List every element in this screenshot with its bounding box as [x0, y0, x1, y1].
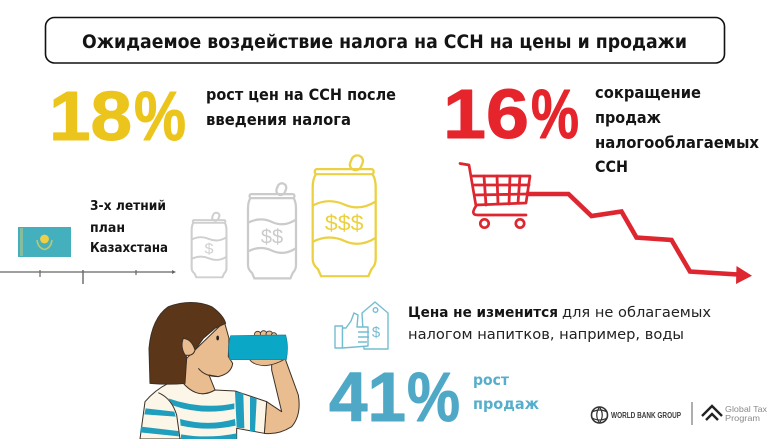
logo: Global Tax Program: Program — [725, 413, 760, 423]
illustration: person drinking — [140, 302, 299, 439]
text: sales growth label: рост — [473, 371, 509, 389]
text: sales growth label — [473, 371, 540, 413]
title — [46, 18, 724, 63]
stat: 41%: % — [407, 358, 460, 436]
icon: small can: $ — [205, 241, 214, 257]
chart: growing cans — [192, 154, 376, 278]
logo: Global Tax Program: Global Tax — [725, 404, 768, 414]
text: plan label: 3-х летний — [90, 198, 166, 214]
eye — [216, 336, 219, 340]
panel: price rise 18% — [49, 77, 396, 155]
icon: thumbs up with price tag — [335, 302, 388, 349]
icon: shopping cart — [460, 164, 530, 228]
text: price rise description: введения налога — [206, 110, 351, 129]
stat: 18%: % — [134, 77, 186, 155]
arrow: falling sales line — [526, 194, 752, 284]
neck and face — [183, 322, 233, 394]
logo: World Bank Group: WORLD BANK GROUP — [611, 411, 682, 420]
text: sales growth label: продаж — [473, 395, 540, 413]
hair — [149, 302, 226, 384]
icon: thumbs up with price tag: $ — [372, 324, 381, 341]
hand — [249, 358, 285, 366]
text: price rise description — [206, 85, 396, 129]
text: plan label: Казахстана — [90, 240, 168, 256]
logos — [592, 402, 768, 425]
stat: 18% — [49, 77, 186, 155]
text: price note: Цена не изменится — [408, 305, 558, 321]
text: sales cut description: ССН — [595, 157, 628, 176]
shirt — [140, 383, 267, 439]
text: price note — [408, 305, 711, 343]
logo: World Bank Group — [592, 407, 682, 423]
title: Ожидаемое воздействие налога на ССН на цены и продажи — [82, 31, 687, 53]
stat: 16%: 16 — [443, 75, 529, 153]
stat: 16%: % — [531, 75, 579, 153]
icon: large can — [313, 154, 376, 276]
cup — [229, 335, 288, 360]
text: plan label — [90, 198, 168, 256]
sleeve seam — [158, 393, 180, 439]
timeline — [0, 270, 176, 284]
text: price rise description: рост цен на ССН после — [206, 85, 396, 104]
icon: large can: $$$ — [325, 210, 364, 236]
panel: Kazakhstan plan — [0, 198, 176, 284]
stat: 18%: 18 — [49, 77, 132, 155]
panel: sales growth 41% — [329, 358, 540, 436]
fingers — [254, 331, 277, 338]
stat: 16% — [443, 75, 579, 153]
stat: 41%: 41 — [329, 358, 406, 436]
icon: small can — [192, 212, 226, 277]
icon: medium can — [248, 182, 296, 278]
stat: 41% — [329, 358, 460, 436]
icon: medium can: $$ — [261, 226, 283, 248]
logo: Global Tax Program — [702, 404, 768, 423]
shirt stripes — [140, 392, 257, 439]
panel: price unchanged — [335, 302, 711, 349]
text: sales cut description: продаж — [595, 108, 661, 127]
arm — [264, 358, 299, 434]
icon: Kazakhstan flag — [18, 227, 71, 257]
text: price note: для не облагаемых — [562, 305, 711, 321]
text: sales cut description: сокращение — [595, 83, 701, 102]
smile — [198, 368, 218, 377]
text: plan label: план — [90, 220, 125, 236]
text: price note: налогом напитков, например, воды — [408, 327, 684, 343]
ear — [182, 338, 195, 355]
text: sales cut description — [595, 83, 760, 176]
text: sales cut description: налогооблагаемых — [595, 133, 760, 152]
panel: sales cut 16% — [443, 75, 760, 284]
